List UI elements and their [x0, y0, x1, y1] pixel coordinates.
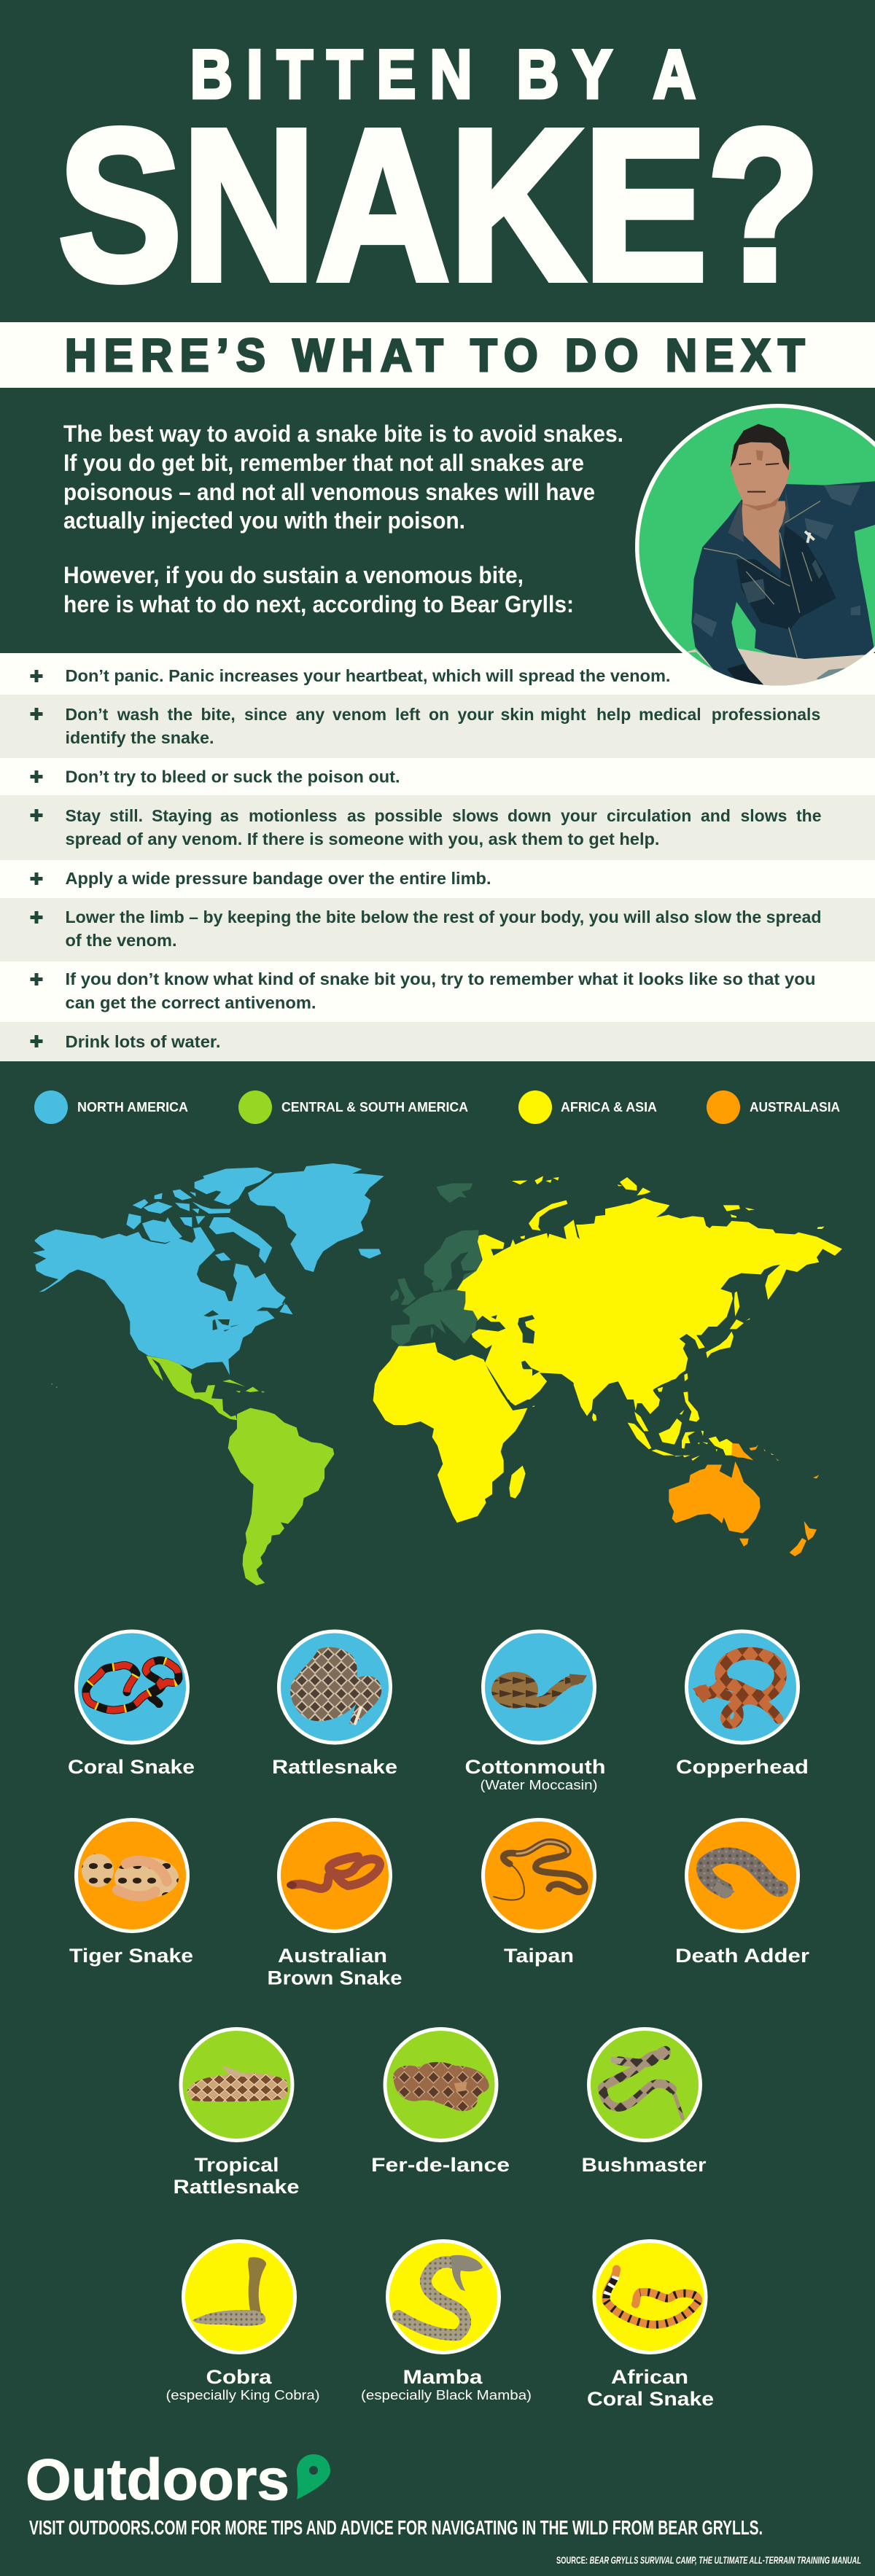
label: Tropical Rattlesnake: Rattlesnake [174, 2176, 299, 2198]
snake card: Cobra [166, 2241, 319, 2403]
snake card: Rattlesnake [272, 1631, 397, 1778]
tip 4: as [347, 806, 370, 825]
icon: copperhead [693, 1653, 780, 1724]
region: North America [33, 1163, 384, 1388]
icon: cobra [192, 2257, 266, 2326]
icon: death adder [704, 1856, 780, 1899]
legend item: Central and South America: CENTRAL & SOUTH AMERICA [281, 1100, 468, 1115]
tip 4: your [561, 806, 602, 825]
label: Tropical Rattlesnake: Tropical [194, 2154, 279, 2176]
tip 4: and [701, 806, 735, 825]
snake card: Mamba [361, 2241, 532, 2403]
title: Bitten by a: BITTEN BY A [190, 36, 696, 112]
intro text: However, if you do sustain a venomous bite, [63, 562, 524, 588]
region: Central and South America [147, 1356, 334, 1585]
icon: map pin [297, 2454, 330, 2499]
tip 2: professionals [712, 705, 820, 724]
label: Bushmaster [582, 2154, 707, 2176]
label: Taipan [504, 1945, 574, 1967]
intro text: poisonous – and not all venomous snakes will have [63, 479, 595, 505]
icon: tropical rattlesnake [187, 2066, 287, 2101]
icon: Australian brown snake [287, 1857, 380, 1889]
subtitle: HERE’S WHAT TO DO NEXT [65, 330, 805, 381]
tip 2: wash [117, 705, 164, 724]
label: Cottonmouth: (Water Moccasin) [480, 1778, 598, 1792]
tip 4: spread of any venom. If there is someone with you, ask them to get help. [66, 830, 659, 848]
tip 1: Don’t panic. Panic increases your heartbeat, which will spread the venom. [66, 666, 671, 685]
tip 2: since [244, 705, 292, 724]
label: Fer-de-lance [371, 2154, 510, 2176]
snake card: Copperhead [676, 1631, 809, 1778]
tip 2: left [395, 705, 425, 724]
panel: advice list [0, 653, 875, 1061]
label: Death Adder [675, 1945, 810, 1967]
icon: bushmaster [602, 2050, 682, 2118]
logo: Outdoors: Outdoors [26, 2447, 289, 2512]
icon: fer-de-lance [393, 2062, 489, 2111]
snake card: African Coral Snake [587, 2241, 714, 2410]
legend [34, 1090, 840, 1124]
icon: rattlesnake [290, 1647, 381, 1725]
subtitle band [0, 322, 875, 388]
tip 8: Drink lots of water. [66, 1032, 220, 1051]
icon: taipan [494, 1842, 585, 1900]
label: Cottonmouth: Cottonmouth [465, 1756, 605, 1778]
tip 4: slows [741, 806, 792, 825]
tip 2: Don’t [66, 705, 113, 724]
intro text: here is what to do next, according to Bear Grylls: [63, 591, 574, 617]
panel: advice list: of the venom. [66, 931, 176, 950]
icon: cottonmouth [491, 1672, 587, 1709]
tip 2: any [296, 705, 330, 724]
label: Coral Snake [68, 1756, 195, 1778]
tip 2: your [458, 705, 499, 724]
legend item: Africa and Asia: AFRICA & ASIA [561, 1100, 657, 1115]
legend item: North America: NORTH AMERICA [77, 1100, 188, 1115]
world map [33, 1163, 842, 1585]
tip 6: Lower the limb – by keeping the bite below the rest of your body, you will also slow the spread [66, 908, 821, 926]
snake card: Bushmaster [582, 2029, 707, 2176]
region: Australasia [669, 1443, 819, 1556]
head [729, 442, 792, 501]
trousers [687, 649, 865, 685]
legend item: Australasia: AUSTRALASIA [750, 1100, 840, 1115]
tip 2: might [540, 705, 591, 724]
tip 2: the [168, 705, 197, 724]
legend item: Africa and Asia [518, 1090, 657, 1124]
snake card: Tiger Snake [69, 1819, 193, 1967]
label: Cobra [166, 2366, 319, 2403]
legend item: Australasia [707, 1090, 840, 1124]
tip 4: motionless [249, 806, 342, 825]
label: Cobra: (especially King Cobra) [166, 2388, 319, 2403]
tip 2: identify the snake. [66, 728, 214, 747]
icon: mamba [398, 2255, 483, 2335]
tip 4: Staying [152, 806, 217, 825]
tip 4: down [508, 806, 556, 825]
tip 2: on [429, 705, 454, 724]
label: Australian Brown Snake: Australian [278, 1945, 387, 1967]
tip 4: slows [452, 806, 503, 825]
legend item: Central and South America [238, 1090, 468, 1124]
snake card: Coral Snake [68, 1631, 195, 1778]
icon: coral snake [86, 1660, 179, 1710]
label: African Coral Snake: African [611, 2366, 688, 2388]
portrait: Bear Grylls in circle [635, 404, 875, 690]
snake card: Death Adder [675, 1819, 810, 1967]
label: African Coral Snake: Coral Snake [587, 2388, 714, 2410]
zips and jacket logo [704, 501, 820, 657]
label: Australian Brown Snake [267, 1945, 402, 1988]
label: Australian Brown Snake: Brown Snake [267, 1967, 402, 1988]
tip 4: still. [109, 806, 147, 825]
label: Rattlesnake [272, 1756, 397, 1778]
tip 2: skin [500, 705, 539, 724]
snake card: Taipan [483, 1819, 595, 1967]
tip 4: as [220, 806, 244, 825]
tip 4: the [796, 806, 821, 825]
label: Tropical Rattlesnake [174, 2154, 299, 2198]
tip 2: venom [332, 705, 392, 724]
snake card: Australian Brown Snake [267, 1819, 402, 1988]
label: Cobra: Cobra [206, 2366, 273, 2388]
tip 2: bite, [201, 705, 240, 724]
tip 2: help [596, 705, 636, 724]
intro text: actually injected you with their poison. [63, 507, 465, 534]
intro text: If you do get bit, remember that not all snakes are [63, 450, 584, 476]
snake card: Cottonmouth [465, 1631, 605, 1792]
sleeve cuff [727, 663, 764, 685]
legend item: North America [34, 1090, 188, 1124]
icons: plus bullets [31, 670, 42, 1047]
jacket [691, 481, 875, 687]
snake card: Tropical Rattlesnake [174, 2029, 299, 2198]
tip 2: medical [639, 705, 706, 724]
tip 5: Apply a wide pressure bandage over the entire limb. [66, 869, 491, 888]
label: Tiger Snake [69, 1945, 193, 1967]
label: Mamba [361, 2366, 532, 2403]
icon: tiger snake [82, 1854, 179, 1898]
region: Europe [390, 1183, 482, 1346]
icon: African coral snake [606, 2269, 699, 2325]
chest and neck [742, 501, 786, 569]
label: Mamba: (especially Black Mamba) [361, 2388, 532, 2403]
tip 4: circulation [607, 806, 696, 825]
label: African Coral Snake [587, 2366, 714, 2410]
tip 4: Stay [66, 806, 105, 825]
tip 4: possible [375, 806, 447, 825]
panel: advice list: can get the correct antivenom. [66, 993, 316, 1012]
intro text: The best way to avoid a snake bite is to avoid snakes. [63, 421, 623, 447]
label: Copperhead [676, 1756, 809, 1778]
facial features [739, 464, 779, 492]
intro text [63, 421, 623, 617]
snake card: Fer-de-lance [371, 2029, 510, 2176]
label: Mamba: Mamba [402, 2366, 483, 2388]
collar [728, 488, 790, 542]
region: Africa and Asia [373, 1176, 842, 1523]
label: Cottonmouth [465, 1756, 605, 1792]
tip 3: Don’t try to bleed or suck the poison out. [66, 767, 400, 786]
tip 7: If you don’t know what kind of snake bit you, try to remember what it looks like so that you [66, 969, 815, 988]
hair [731, 424, 790, 471]
